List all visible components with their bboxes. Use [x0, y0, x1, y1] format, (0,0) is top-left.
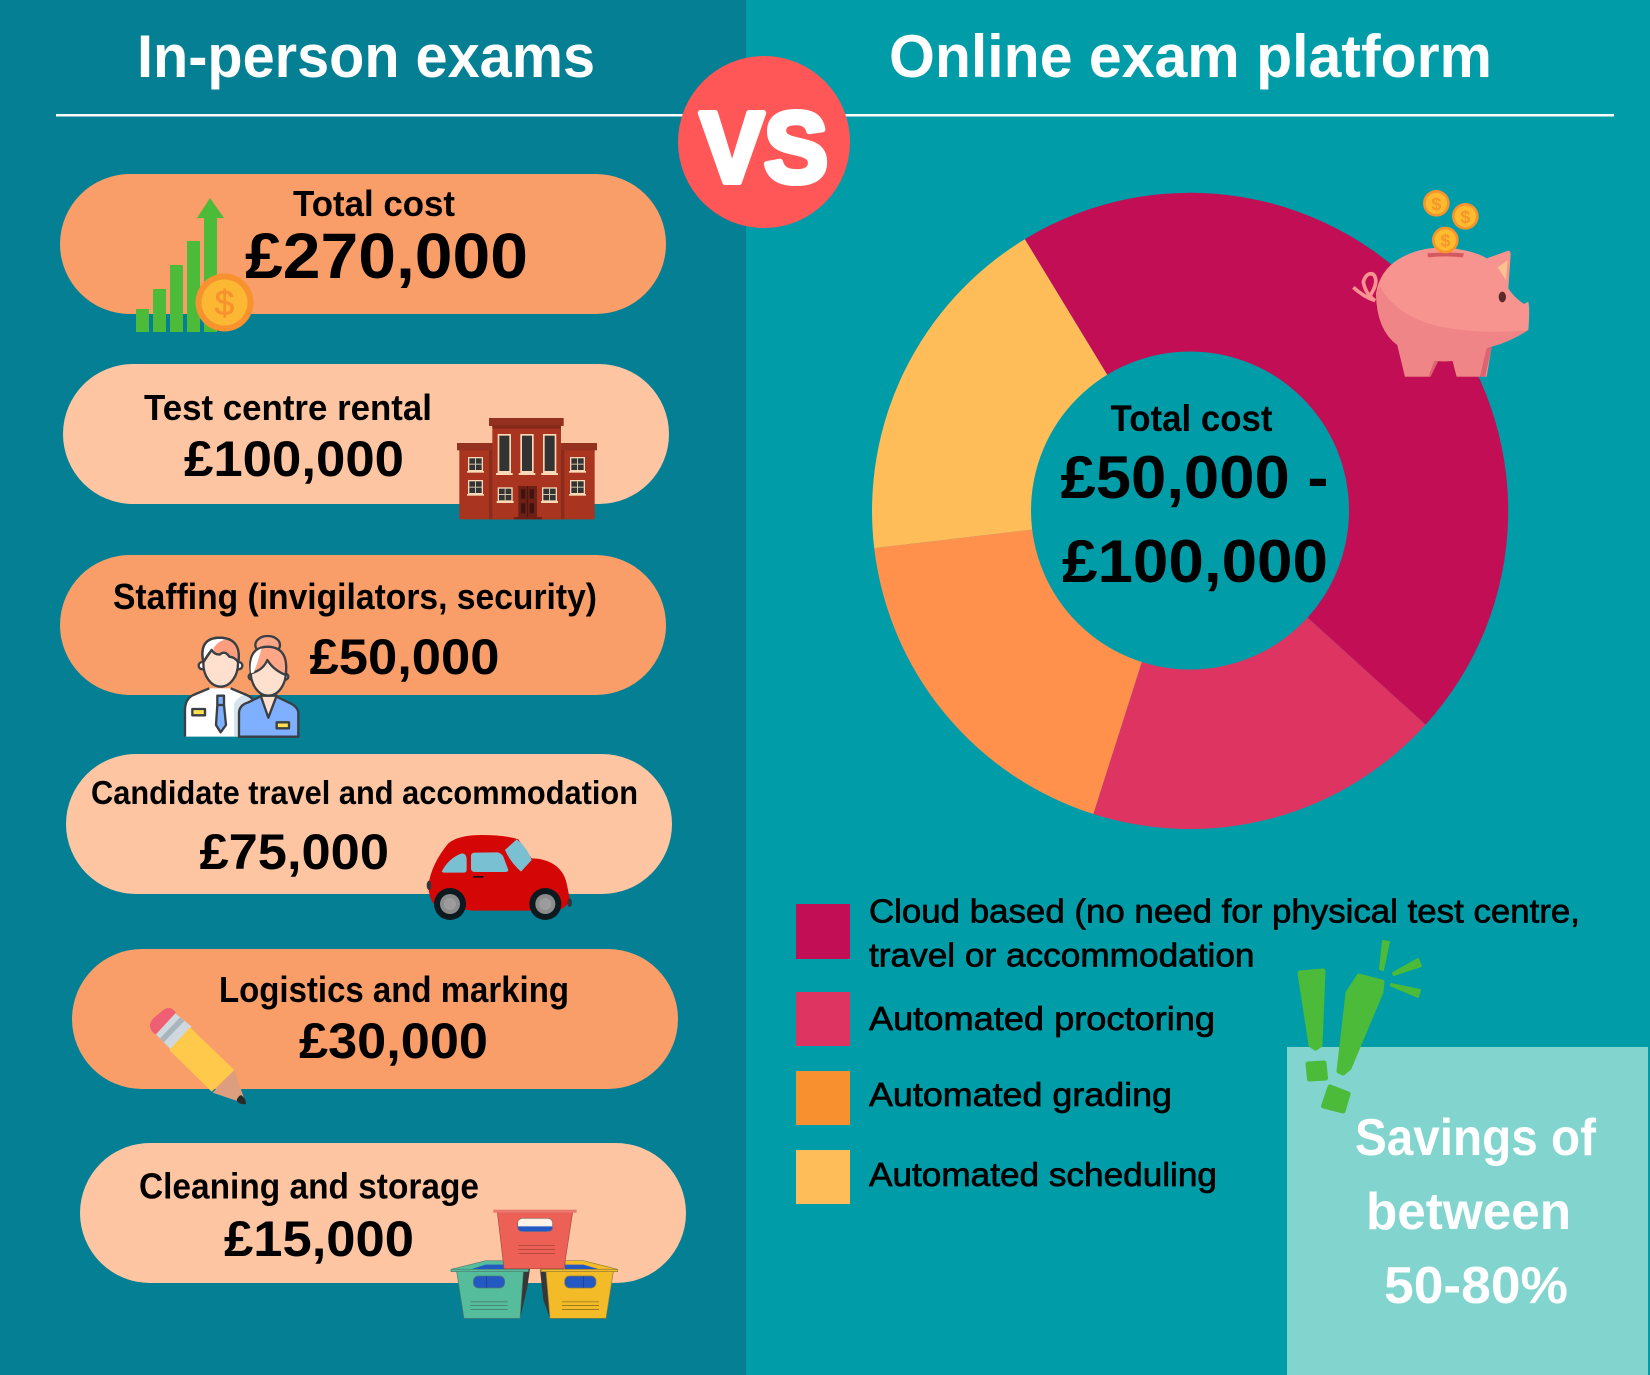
pill: logistics and marking: Logistics and marking: [219, 969, 569, 1010]
callout: savings: [1287, 1047, 1648, 1375]
pill: staffing: £50,000: [310, 629, 500, 685]
icon: red car: [427, 835, 572, 920]
heading: online exam platform: Online exam platform: [889, 23, 1492, 90]
panel: in-person exams: [0, 0, 746, 1375]
legend: Automated scheduling: [869, 1156, 1217, 1193]
icon: brick building: [457, 418, 597, 519]
callout: savings: Savings of: [1355, 1109, 1597, 1167]
panel: online exam platform: [746, 0, 1650, 1375]
badge: VS: VS: [700, 92, 828, 204]
pill: test centre rental: £100,000: [184, 431, 404, 487]
icon: piggy bank with coins: $: [1440, 231, 1450, 251]
pill: total cost: Total cost: [293, 183, 455, 224]
donut centre: total cost: Total cost: [1110, 398, 1272, 439]
donut centre: total cost: £100,000: [1062, 528, 1328, 595]
pill: total cost: [60, 174, 666, 332]
heading: in-person exams: In-person exams: [137, 23, 595, 90]
pill: staffing: Staffing (invigilators, security): [113, 576, 597, 617]
pill: cleaning and storage: [80, 1143, 686, 1318]
icon: piggy bank with coins: $: [1431, 194, 1441, 214]
pill: candidate travel and accommodation: Candidate travel and accommodation: [91, 774, 638, 811]
icon: rising bar chart with coin: [136, 198, 254, 332]
icon: piggy bank with coins: $: [1460, 207, 1470, 227]
legend: Automated proctoring: [869, 1000, 1215, 1037]
icon: green exclamation marks: [1300, 941, 1421, 1111]
pill: staffing: [60, 555, 666, 737]
callout: savings: 50-80%: [1384, 1257, 1568, 1315]
icon: rising bar chart with coin: $: [215, 284, 234, 323]
pill: candidate travel and accommodation: [66, 754, 672, 920]
legend: Cloud based (no need for physical test centre,: [869, 892, 1580, 930]
callout: savings: between: [1366, 1183, 1571, 1241]
rule: header divider: [56, 114, 1614, 116]
pill: total cost: £270,000: [245, 220, 528, 292]
icon: piggy bank with coins: [1353, 190, 1529, 377]
legend: travel or accommodation: [869, 936, 1254, 974]
donut chart: cost breakdown: [872, 193, 1508, 829]
legend: [796, 892, 1580, 1204]
legend: Automated grading: [869, 1076, 1172, 1113]
pill: logistics and marking: £30,000: [299, 1013, 488, 1069]
pill: cleaning and storage: £15,000: [224, 1211, 414, 1267]
badge: VS: [678, 56, 850, 228]
icon: storage boxes: [451, 1210, 618, 1318]
donut centre: total cost: [1060, 398, 1328, 595]
pill: test centre rental: [63, 364, 669, 519]
icon: pencil: [150, 1008, 246, 1104]
pill: test centre rental: Test centre rental: [144, 387, 432, 428]
pill: logistics and marking: [72, 949, 678, 1104]
pill: cleaning and storage: Cleaning and storage: [139, 1166, 479, 1206]
donut centre: total cost: £50,000 -: [1060, 444, 1328, 511]
icon: two staff members: [185, 636, 298, 737]
pill: candidate travel and accommodation: £75,000: [200, 824, 389, 880]
